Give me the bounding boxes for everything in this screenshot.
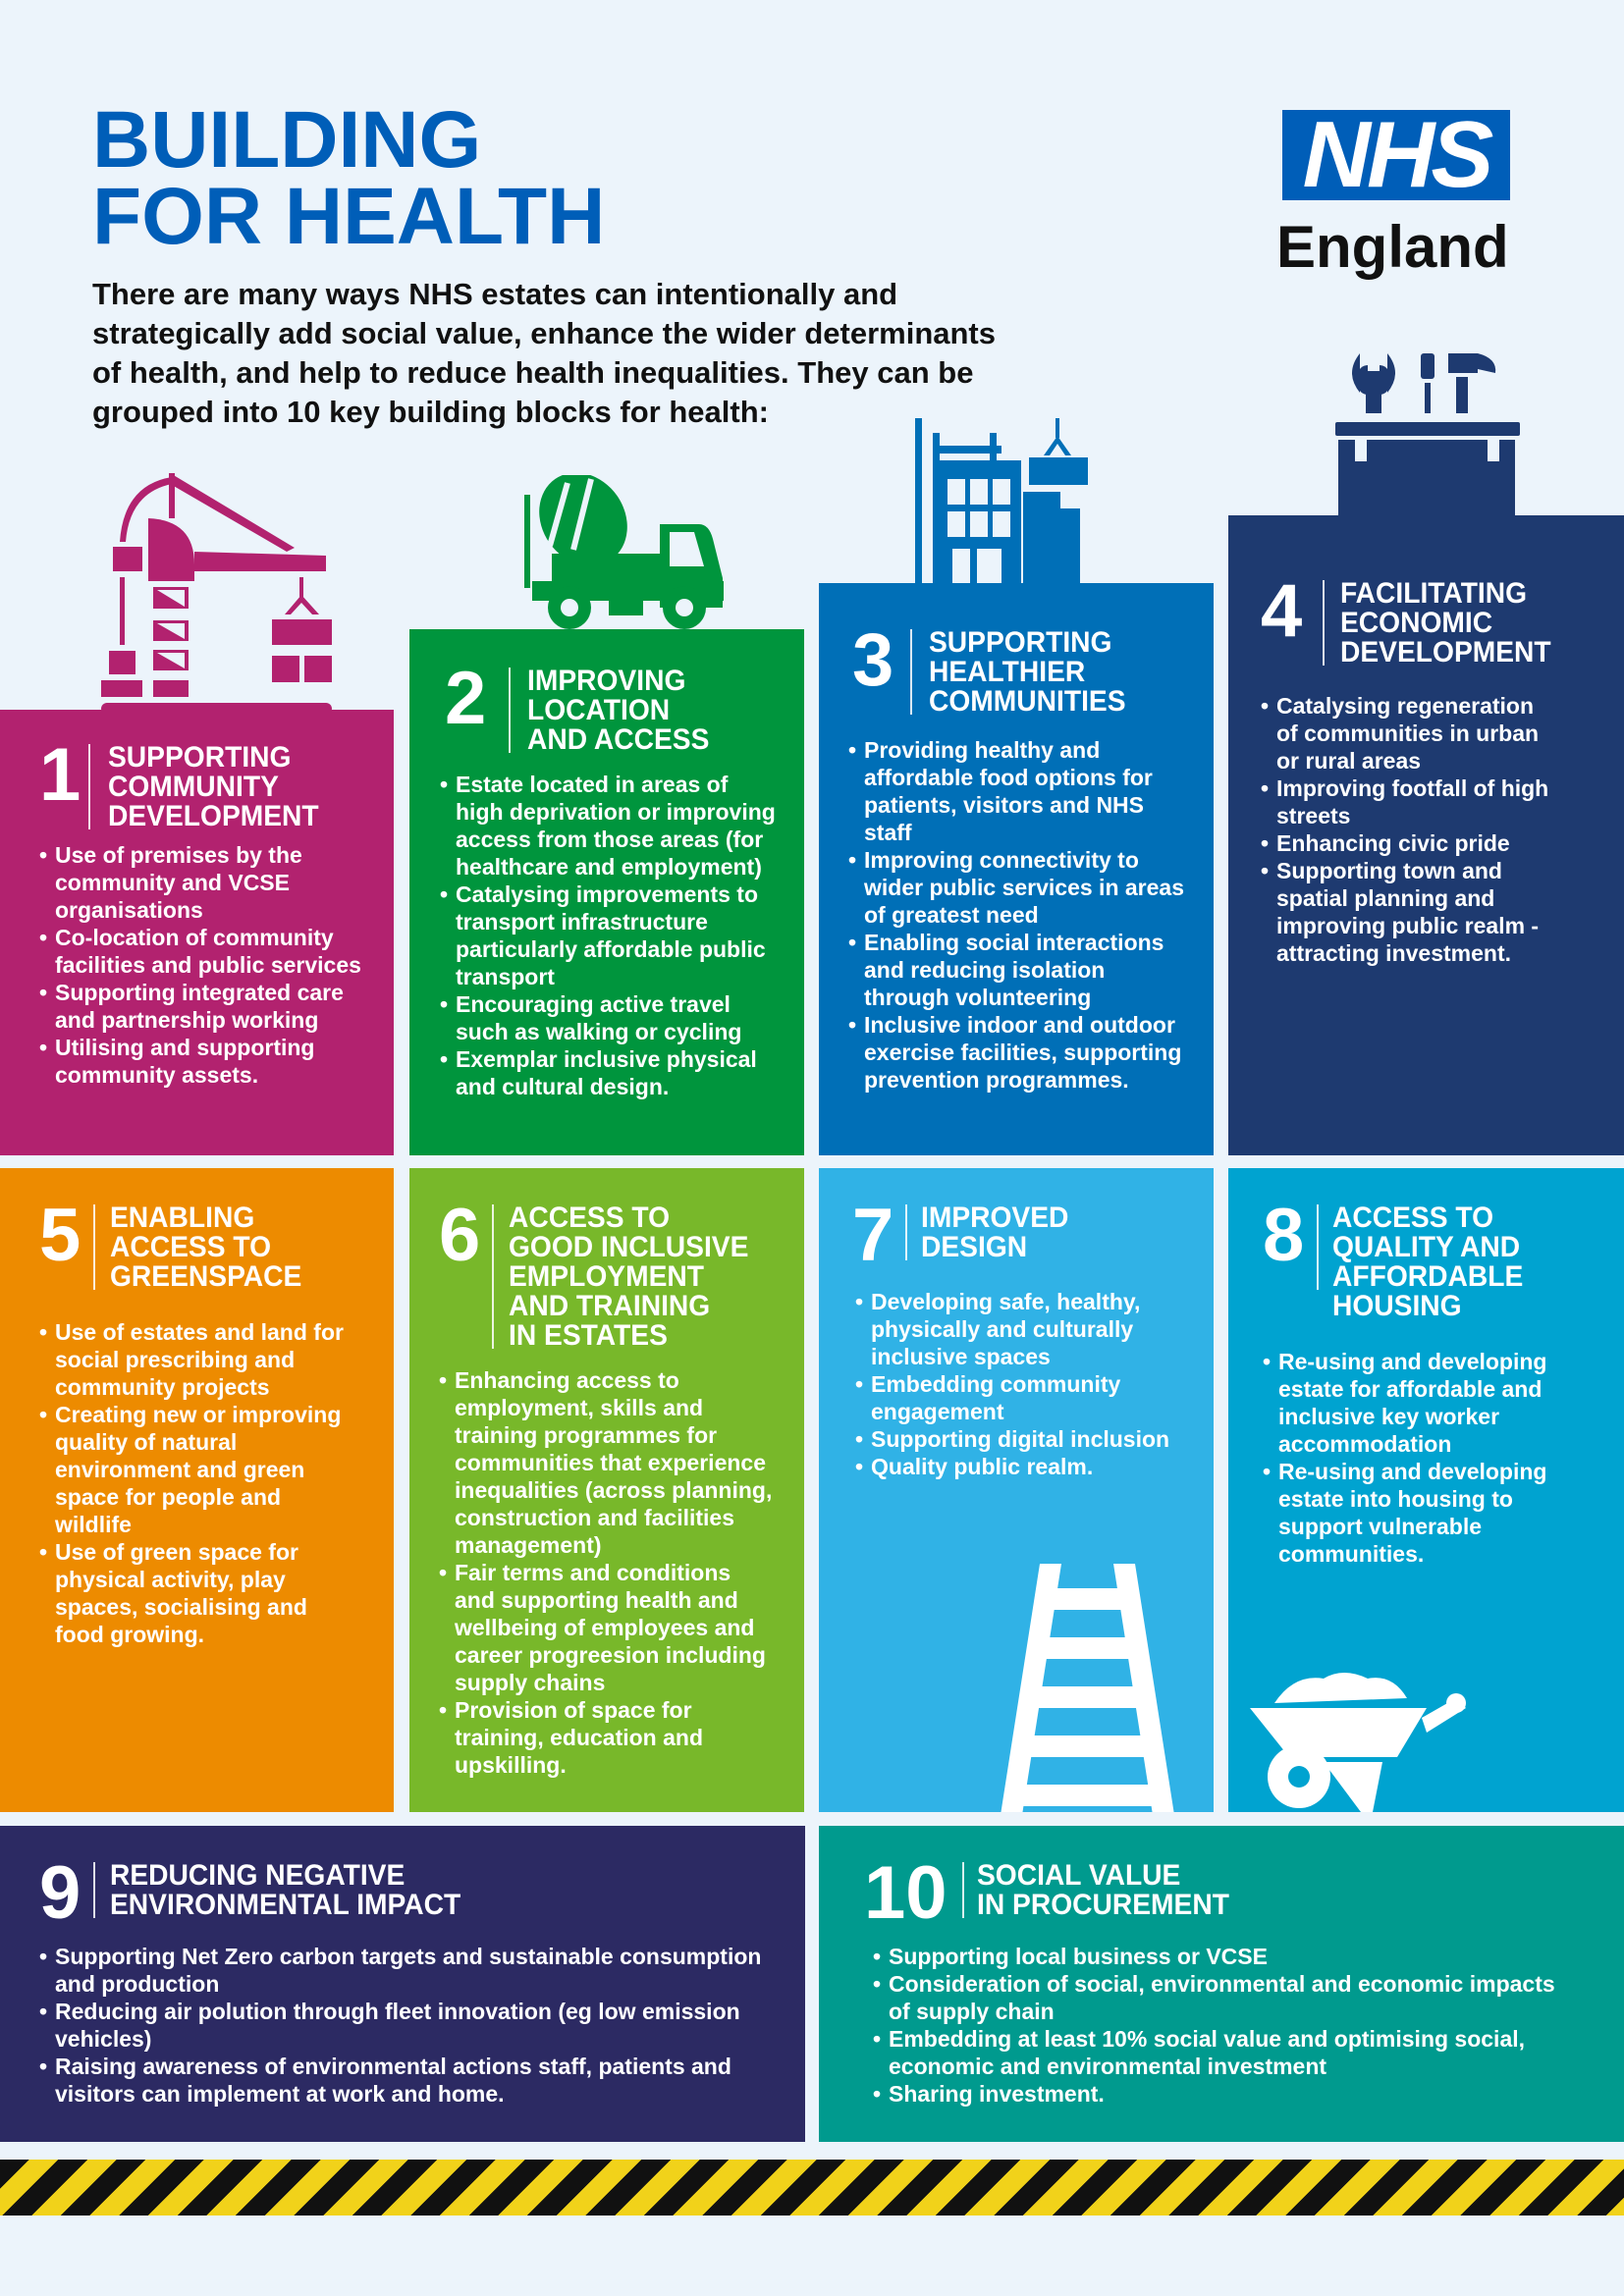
intro text: There are many ways NHS estates can intentionally and [92,277,897,311]
body 10: Supporting local business or VCSE [889,1944,1268,1969]
body 7: Developing safe, healthy, [871,1289,1140,1314]
body 8: estate into housing to [1278,1486,1513,1512]
heading 1: COMMUNITY [108,771,279,803]
body 8: Re-using and developing [1278,1459,1546,1484]
body 6: communities that experience [455,1450,766,1475]
body 6: training, education and [455,1725,703,1750]
heading 7: DESIGN [921,1231,1027,1263]
heading 1 [108,741,319,832]
body 8: accommodation [1278,1431,1451,1457]
heading 4: ECONOMIC [1340,607,1492,639]
intro text: strategically add social value, enhance the wider determinants [92,316,996,350]
body 7 [856,1289,1169,1479]
panel 7: improved design: 7 [852,1194,893,1277]
body 3: Inclusive indoor and outdoor [864,1012,1175,1038]
body 1 [39,842,361,1088]
icon: toolbox [1335,353,1520,515]
panel 9: reducing negative environmental impact [0,1826,805,2142]
body 9 [39,1944,761,2107]
body 3: Improving connectivity to [864,847,1139,873]
heading 3 [929,626,1126,718]
body 6: construction and facilities [455,1505,734,1530]
heading 6 [509,1201,748,1352]
body 1: Use of premises by the [55,842,302,868]
heading 8: ACCESS TO [1332,1201,1493,1234]
body 2: healthcare and employment) [456,854,762,880]
body 8: estate for affordable and [1278,1376,1542,1402]
body 4: attracting investment. [1276,940,1511,966]
body 6: Fair terms and conditions [455,1560,731,1585]
body 1: Utilising and supporting [55,1035,314,1060]
body 6: career progreesion including [455,1642,766,1668]
body 10: Sharing investment. [889,2081,1105,2107]
body 4: or rural areas [1276,748,1421,774]
body 10: Embedding at least 10% social value and optimising social, [889,2026,1525,2052]
body 4: Supporting town and [1276,858,1502,883]
body 8: support vulnerable [1278,1514,1482,1539]
panel 3: supporting healthier communities [819,583,1214,1155]
body 9: Supporting Net Zero carbon targets and sustainable consumption [55,1944,761,1969]
body 5: wildlife [55,1512,132,1537]
body 4: Enhancing civic pride [1276,830,1510,856]
body 1: Co-location of community [55,925,334,950]
body 2: Exemplar inclusive physical [456,1046,757,1072]
body 6: and supporting health and [455,1587,738,1613]
heading 6: ACCESS TO [509,1201,670,1234]
heading 6: GOOD INCLUSIVE [509,1231,748,1263]
body 2: Encouraging active travel [456,991,731,1017]
body 2: Estate located in areas of [456,772,728,797]
body 2: high deprivation or improving [456,799,776,825]
body 6: Enhancing access to [455,1367,679,1393]
icon: cement truck [524,475,724,629]
body 3: patients, visitors and NHS [864,792,1144,818]
panel 2: improving location and access: 2 [445,657,486,740]
icon: ladder [1001,1564,1174,1812]
body 3: staff [864,820,912,845]
panel 8: access to quality affordable housing [1228,1168,1624,1812]
body 7: Embedding community [871,1371,1120,1397]
body 6: management) [455,1532,602,1558]
body 2: access from those areas (for [456,827,763,852]
body 6: employment, skills and [455,1395,703,1420]
body 5 [39,1319,344,1647]
icon: wheelbarrow [1250,1673,1466,1812]
body 4: of communities in urban [1276,721,1539,746]
body 6 [440,1367,772,1778]
heading 3: SUPPORTING [929,626,1111,659]
heading 10: IN PROCUREMENT [977,1889,1229,1921]
body 2: transport [456,964,555,989]
body 4: spatial planning and [1276,885,1494,911]
icon: building under construction [915,418,1088,583]
body 2 [440,772,776,1099]
heading 9: ENVIRONMENTAL IMPACT [110,1889,460,1921]
heading 4: DEVELOPMENT [1340,636,1551,668]
heading 1: DEVELOPMENT [108,800,319,832]
body 3: Providing healthy and [864,737,1100,763]
body 6: training programmes for [455,1422,717,1448]
intro text: of health, and help to reduce health inequalities. They can be [92,355,973,390]
heading 7: IMPROVED [921,1201,1068,1234]
heading 8 [1332,1201,1523,1322]
heading 4: FACILITATING [1340,577,1527,610]
body 5: social prescribing and [55,1347,295,1372]
heading 9: REDUCING NEGATIVE [110,1859,405,1892]
body 8 [1263,1349,1546,1567]
body 5: space for people and [55,1484,281,1510]
panel 9: reducing negative environmental impact: 9 [39,1851,81,1935]
body 6: inequalities (across planning, [455,1477,772,1503]
body 9: Raising awareness of environmental actions staff, patients and [55,2054,731,2079]
body 4: Catalysing regeneration [1276,693,1534,719]
panel 1: supporting community development [0,710,394,1155]
panel 7: improved design [819,1168,1214,1812]
body 3: of greatest need [864,902,1039,928]
intro text [92,277,996,429]
body 7: Quality public realm. [871,1454,1093,1479]
body 1: organisations [55,897,203,923]
body 4: streets [1276,803,1350,828]
body 3: and reducing isolation [864,957,1105,983]
body 1: Supporting integrated care [55,980,344,1005]
heading 10: SOCIAL VALUE [977,1859,1180,1892]
heading 8: HOUSING [1332,1290,1462,1322]
heading 3: COMMUNITIES [929,685,1126,718]
body 1: community and VCSE [55,870,290,895]
panel 3: supporting healthier communities: 3 [852,618,893,702]
body 2: transport infrastructure [456,909,708,934]
title: BUILDING [92,95,481,185]
panel 10: social value in procurement: 10 [864,1851,947,1935]
heading 5 [110,1201,301,1293]
body 3: wider public services in areas [864,875,1184,900]
body 7: physically and culturally [871,1316,1133,1342]
body 10: of supply chain [889,1999,1055,2024]
panel 5: enabling access to greenspace [0,1168,394,1812]
body 6: Provision of space for [455,1697,692,1723]
body 3: through volunteering [864,985,1091,1010]
heading 5: GREENSPACE [110,1260,301,1293]
body 3: affordable food options for [864,765,1153,790]
heading 6: EMPLOYMENT [509,1260,704,1293]
heading 2: AND ACCESS [527,723,709,756]
body 8: communities. [1278,1541,1424,1567]
heading 3: HEALTHIER [929,656,1085,688]
body 5: environment and green [55,1457,304,1482]
panel 6: access to good inclusive employment: 6 [439,1194,480,1277]
body 4 [1261,693,1548,966]
panel 4: facilitating economic development: 4 [1261,569,1302,653]
heading 6: AND TRAINING [509,1290,710,1322]
body 2: particularly affordable public [456,936,766,962]
body 8: inclusive key worker [1278,1404,1499,1429]
panel 4: facilitating economic development [1228,515,1624,1155]
body 2: and cultural design. [456,1074,669,1099]
body 7: inclusive spaces [871,1344,1051,1369]
body 9: vehicles) [55,2026,151,2052]
body 1: facilities and public services [55,952,361,978]
body 5: community projects [55,1374,270,1400]
panel 5: enabling access to greenspace: 5 [39,1194,81,1277]
body 10 [874,1944,1555,2107]
intro text: grouped into 10 key building blocks for health: [92,395,769,429]
heading 2: LOCATION [527,694,670,726]
body 5: physical activity, play [55,1567,286,1592]
body 9: Reducing air polution through fleet innovation (eg low emission [55,1999,740,2024]
body 1: and partnership working [55,1007,318,1033]
body 10: Consideration of social, environmental and economic impacts [889,1971,1555,1997]
NHS England logo [1276,102,1510,280]
heading 7 [921,1201,1068,1263]
body 6: wellbeing of employees and [455,1615,754,1640]
heading 4 [1340,577,1551,668]
hazard stripe [0,2160,1624,2216]
body 6: upskilling. [455,1752,567,1778]
body 5: Creating new or improving [55,1402,341,1427]
NHS England logo: England [1276,214,1509,280]
body 5: food growing. [55,1622,204,1647]
body 2: Catalysing improvements to [456,881,758,907]
body 3 [848,737,1184,1093]
body 5: quality of natural [55,1429,237,1455]
title [92,95,605,261]
heading 8: QUALITY AND [1332,1231,1520,1263]
panel 1: supporting community development: 1 [39,733,81,817]
body 3: Enabling social interactions [864,930,1164,955]
body 9: visitors can implement at work and home. [55,2081,505,2107]
body 2: such as walking or cycling [456,1019,741,1044]
body 4: improving public realm - [1276,913,1539,938]
body 7: engagement [871,1399,1003,1424]
body 9: and production [55,1971,219,1997]
body 3: prevention programmes. [864,1067,1129,1093]
body 4: Improving footfall of high [1276,775,1548,801]
title: FOR HEALTH [92,172,605,261]
heading 6: IN ESTATES [509,1319,668,1352]
panel 10: social value in procurement [819,1826,1624,2142]
heading 8: AFFORDABLE [1332,1260,1523,1293]
body 5: Use of estates and land for [55,1319,344,1345]
panel 2: improving location and access [409,629,804,1155]
panel 8: access to quality affordable housing: 8 [1263,1194,1304,1277]
heading 1: SUPPORTING [108,741,291,774]
heading 5: ENABLING [110,1201,254,1234]
body 5: Use of green space for [55,1539,298,1565]
heading 2 [527,665,709,756]
heading 9 [110,1859,460,1921]
icon: crane [101,473,332,710]
body 3: exercise facilities, supporting [864,1040,1181,1065]
heading 10 [977,1859,1229,1921]
NHS England logo: NHS [1303,102,1489,207]
body 6: supply chains [455,1670,605,1695]
body 1: community assets. [55,1062,258,1088]
heading 5: ACCESS TO [110,1231,271,1263]
heading 2: IMPROVING [527,665,685,697]
body 10: economic and environmental investment [889,2054,1326,2079]
body 7: Supporting digital inclusion [871,1426,1169,1452]
body 5: spaces, socialising and [55,1594,307,1620]
panel 6: access to good inclusive employment [409,1168,804,1812]
body 8: Re-using and developing [1278,1349,1546,1374]
